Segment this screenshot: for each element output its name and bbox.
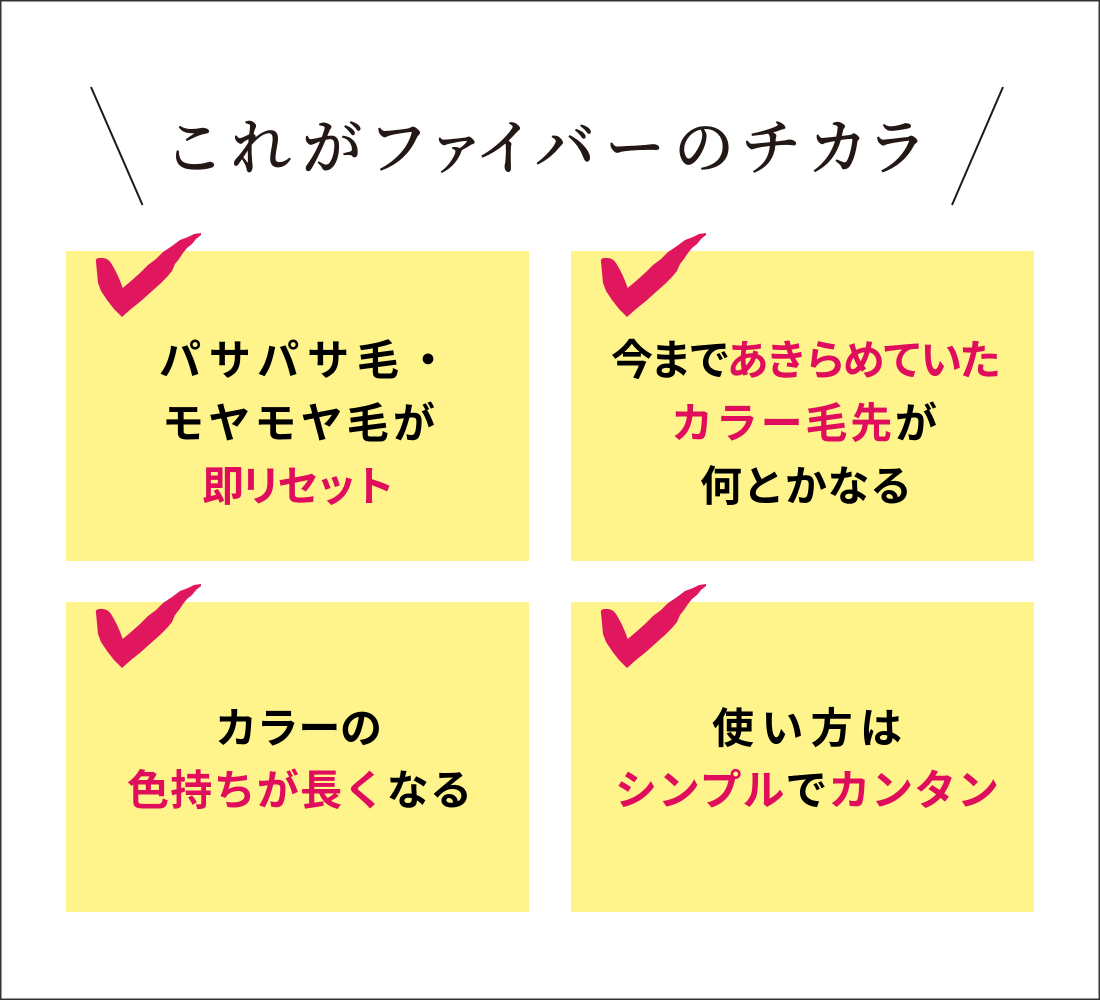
panel text: シンプルでカンタン [615, 767, 999, 814]
left slash [91, 87, 142, 205]
panel: dry hair reset [66, 233, 529, 561]
panel text [611, 337, 1001, 510]
panel: color lasts longer [66, 584, 529, 912]
panel text: モヤモヤ毛が [162, 400, 435, 447]
panel: colored hair tips [571, 233, 1034, 561]
panel text [615, 705, 999, 814]
panel text: 即リセット [202, 463, 395, 510]
panel text: 今まであきらめていた [611, 337, 1001, 384]
icon: check mark [601, 584, 706, 668]
icon: check mark [96, 584, 201, 668]
title group [91, 87, 1003, 205]
panel: simple and easy [571, 584, 1034, 912]
panel text: パサパサ毛・ [159, 337, 449, 384]
icon: check mark [96, 233, 201, 317]
panel text: 色持ちが長くなる [127, 767, 472, 814]
panel text [127, 705, 472, 814]
right slash [952, 87, 1003, 205]
panel text: カラー毛先が [671, 400, 937, 447]
panel text: 何とかなる [700, 463, 912, 510]
panel text: 使い方は [712, 705, 902, 752]
panel text: カラーの [215, 705, 382, 752]
panel text [159, 337, 449, 510]
icon: check mark [601, 233, 706, 317]
title: これがファイバーのチカラ [164, 115, 927, 182]
